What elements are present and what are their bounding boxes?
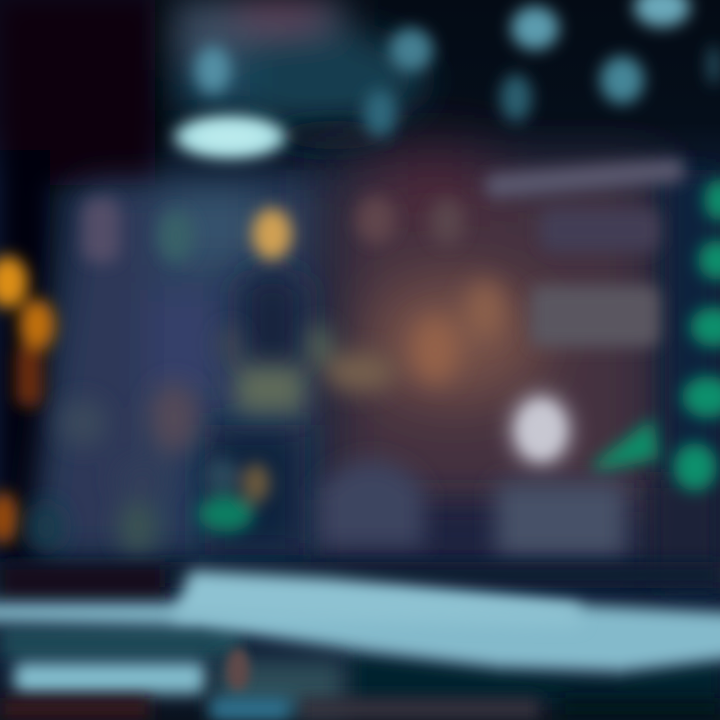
green right column dots bbox=[673, 179, 720, 491]
panel: right column dark bbox=[650, 170, 720, 590]
bokeh: top lights bbox=[195, 0, 720, 137]
table upper left corner bbox=[172, 570, 580, 625]
orange highlights bbox=[0, 208, 292, 544]
left dark wall bbox=[0, 0, 155, 570]
lamp core bbox=[192, 126, 268, 148]
dark vertical shape bbox=[205, 270, 305, 555]
dark band above table bbox=[0, 562, 720, 600]
text bars top right bbox=[82, 157, 686, 347]
white glow dot bbox=[513, 396, 569, 464]
small green and orange marker bbox=[198, 458, 270, 532]
faint column marks bbox=[28, 382, 200, 555]
top teal haze bbox=[175, 0, 425, 130]
lower card 2 bbox=[496, 482, 626, 558]
panel: central chart reddish bbox=[330, 150, 660, 540]
lamp highlight bbox=[174, 116, 286, 158]
brown object bbox=[226, 648, 250, 692]
lower light blue strip bbox=[14, 662, 206, 694]
main light blue table band bbox=[0, 595, 720, 672]
dark strip below table bbox=[0, 628, 720, 702]
white dot core bbox=[521, 404, 561, 456]
lower card 1 bbox=[318, 460, 424, 548]
panel: lower central darkening bbox=[320, 500, 640, 570]
green arrow stroke bbox=[595, 425, 655, 468]
grey teal strip bbox=[215, 660, 345, 712]
line chart blurred bbox=[220, 280, 505, 413]
panel: left chart column bbox=[30, 180, 320, 555]
dark gap under haze bbox=[275, 121, 395, 149]
bottom edge colours bbox=[0, 698, 720, 720]
